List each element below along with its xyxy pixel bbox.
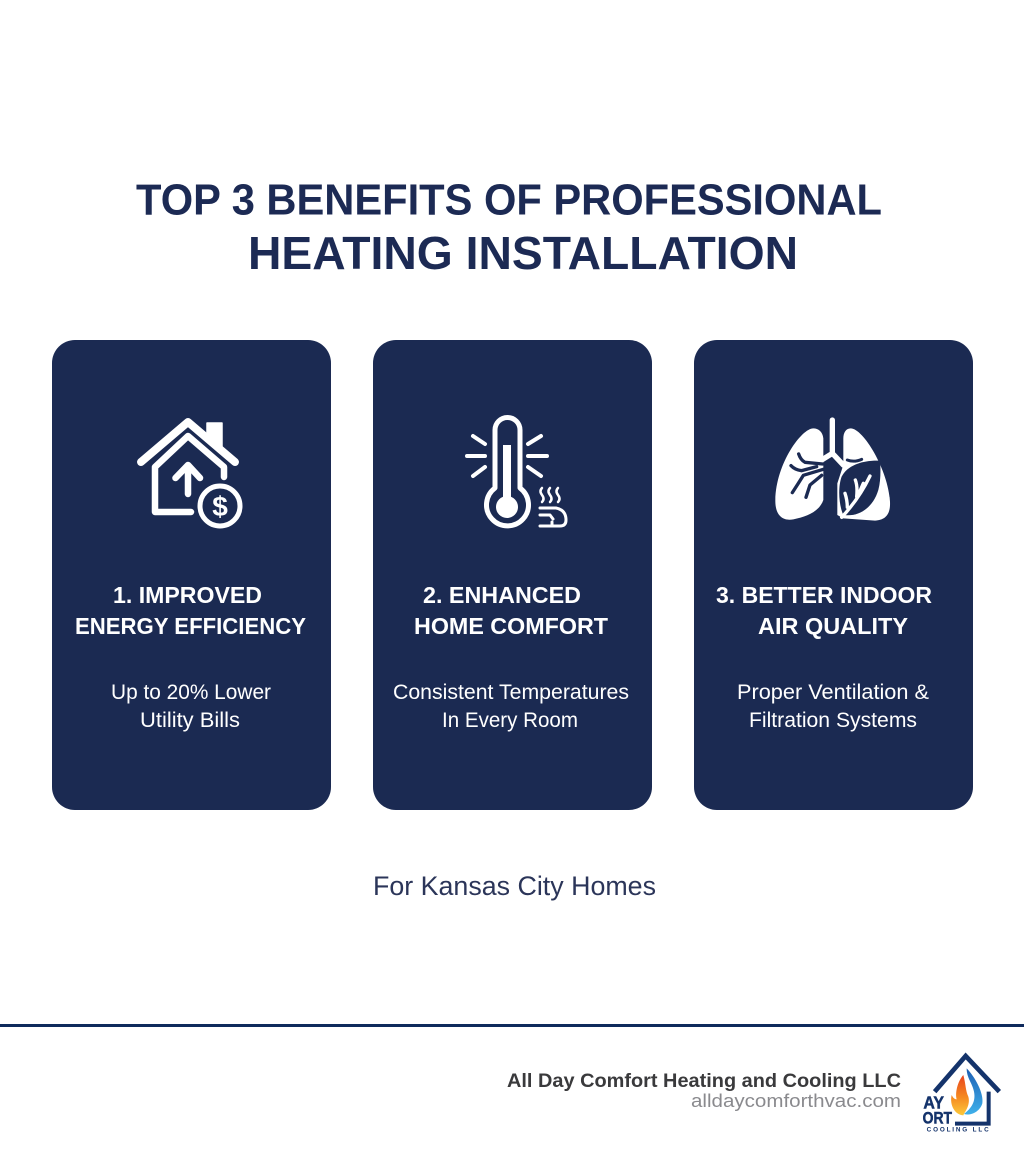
panel: improved energy efficiency [52, 340, 331, 810]
footer website: alldaycomforthvac.com [691, 1091, 901, 1111]
tagline: For Kansas City Homes [373, 871, 656, 901]
text: utility bills: Up to 20% Lower [111, 681, 271, 704]
text: consistent temperatures: In Every Room [442, 709, 578, 732]
panel: enhanced home comfort [373, 340, 652, 810]
text: utility bills [111, 681, 271, 732]
text: consistent temperatures: Consistent Temperatures [393, 681, 629, 704]
icon: house with dollar coin: $ [212, 491, 228, 522]
heading: enhanced home comfort [414, 582, 608, 639]
icon: house with dollar coin [141, 422, 240, 526]
heading: better indoor air quality [716, 582, 932, 639]
heading: better indoor air quality: AIR QUALITY [758, 613, 908, 639]
heading: improved energy efficiency: ENERGY EFFICIENCY [75, 613, 306, 639]
title [136, 176, 882, 279]
icon: company logo: COOLING LLC [927, 1127, 989, 1134]
text: ventilation and filtration: Filtration Systems [749, 709, 917, 732]
panel: better indoor air quality [694, 340, 973, 810]
heading: enhanced home comfort: HOME COMFORT [414, 613, 608, 639]
icon: lungs with leaf [775, 420, 890, 521]
title: HEATING INSTALLATION [248, 227, 798, 279]
icon: thermometer with heat [467, 417, 566, 526]
heading: improved energy efficiency: 1. IMPROVED [113, 582, 262, 608]
footer company name: All Day Comfort Heating and Cooling LLC [507, 1071, 901, 1092]
heading: improved energy efficiency [75, 582, 306, 639]
icon: company logo: ORT [923, 1108, 952, 1127]
text: ventilation and filtration [737, 681, 929, 732]
title: TOP 3 BENEFITS OF PROFESSIONAL [136, 176, 882, 224]
text: ventilation and filtration: Proper Ventilation & [737, 681, 929, 704]
icon: company logo: AY [923, 1092, 944, 1112]
heading: better indoor air quality: 3. BETTER INDOOR [716, 582, 932, 608]
heading: enhanced home comfort: 2. ENHANCED [423, 582, 581, 608]
icon: company logo [923, 1056, 999, 1134]
text: consistent temperatures [393, 681, 629, 732]
text: utility bills: Utility Bills [140, 709, 240, 732]
footer divider [0, 1024, 1024, 1027]
